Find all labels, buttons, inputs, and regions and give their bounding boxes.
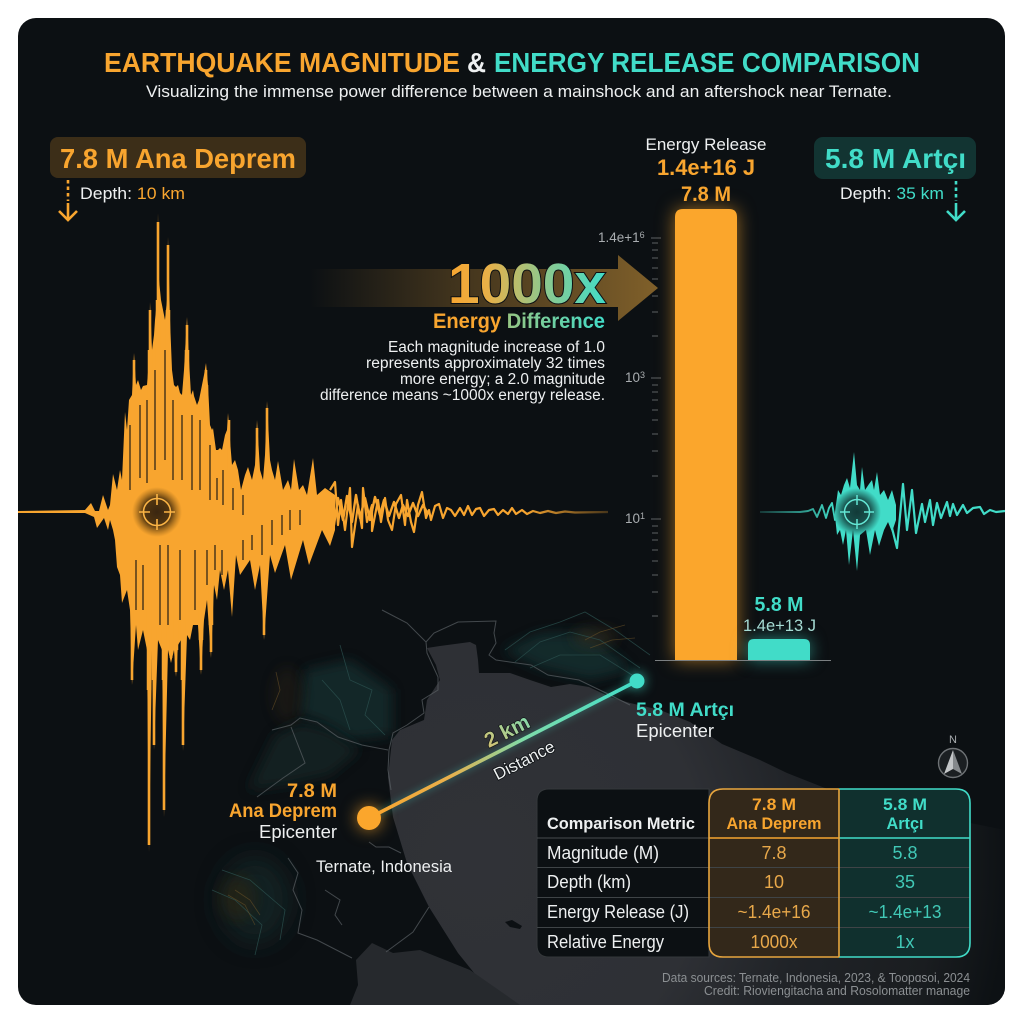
bar: 5.8 M (748, 639, 810, 660)
axis labels: 3 (640, 370, 645, 380)
label: 7.8 M bar (646, 135, 766, 206)
bar chart: energy release (598, 135, 831, 660)
credits: Data sources: Ternate, Indonesia, 2023, & Toopɑsoi, 2024 (662, 971, 970, 985)
title: EARTHQUAKE MAGNITUDE (104, 47, 460, 78)
header row: Ana Deprem (726, 814, 822, 833)
title: ENERGY RELEASE COMPARISON (494, 47, 920, 78)
title (104, 47, 920, 78)
heading: energy difference: Energy Difference (433, 310, 605, 333)
marker: aftershock epicenter (630, 674, 644, 688)
distance value: 2 km (481, 710, 534, 753)
panel: aftershock label (814, 137, 976, 220)
sea (388, 642, 1005, 1005)
explanatory text (320, 339, 605, 404)
aftershock values (868, 843, 942, 952)
marker: mainshock epicenter (357, 806, 381, 830)
chip: 7.8 M Ana Deprem: 7.8 M Ana Deprem (60, 143, 296, 174)
distance line (369, 681, 637, 818)
second tail trace (330, 495, 428, 525)
arrow: energy difference (310, 255, 658, 321)
aftershock values: 35 (895, 872, 915, 892)
axis labels: 6 (640, 230, 645, 240)
wide spike bases (149, 300, 211, 690)
explanatory text: represents approximately 32 times (366, 355, 605, 372)
aftershock column (839, 789, 970, 957)
row labels: Relative Energy (547, 932, 664, 952)
icon: north compass (938, 734, 968, 778)
land tint patches (219, 627, 632, 944)
chip: 5.8 M Artçı (814, 137, 976, 179)
axis labels (598, 230, 645, 526)
roads and coast lines (257, 610, 630, 958)
explanatory text: Each magnitude increase of 1.0 (388, 339, 605, 356)
row labels (547, 843, 689, 952)
label: mainshock epicenter: 7.8 M (287, 781, 337, 802)
label: aftershock epicenter: Epicenter (636, 721, 714, 741)
header row: 5.8 M (883, 795, 927, 814)
icon: depth arrow (947, 181, 965, 220)
label: 5.8 M bar (743, 594, 816, 635)
header row: Artçı (886, 814, 924, 833)
depth text: Depth: 35 km (840, 184, 944, 203)
row labels: Energy Release (J) (547, 902, 689, 922)
distance caption: Distance (490, 737, 558, 784)
depth text: Depth: 10 km (80, 184, 185, 203)
row dividers (537, 868, 970, 928)
mainshock values: ~1.4e+16 (738, 902, 810, 922)
metric column background (537, 789, 709, 957)
label: 5.8 M bar: 5.8 M (754, 594, 804, 616)
icon: mainshock crosshair (132, 487, 182, 537)
header row (547, 795, 927, 833)
chart: aftershock seismic waveform (760, 452, 1005, 571)
title: & (467, 47, 486, 78)
label: mainshock epicenter: Epicenter (259, 822, 337, 842)
tail zigzags (890, 484, 1005, 548)
axis labels: 1 (640, 511, 645, 521)
panel: mainshock label (50, 137, 306, 220)
credits: Credit: Rioviengitacha and Rosolomatter manage (704, 984, 970, 998)
icon: north compass: N (949, 734, 957, 746)
comparison table (537, 789, 970, 957)
dark slits between spikes (130, 350, 300, 625)
aftershock values: ~1.4e+13 (868, 902, 942, 922)
axis labels: 10 (625, 370, 640, 385)
mainshock column (709, 789, 839, 957)
mainshock values (738, 843, 810, 952)
row labels: Magnitude (M) (547, 843, 659, 863)
map: Ternate region (212, 610, 1005, 1005)
baseline (655, 660, 831, 662)
icon: depth arrow (59, 180, 77, 220)
chip: 5.8 M Artçı: 5.8 M Artçı (825, 143, 966, 174)
tail zigzag (330, 482, 608, 547)
credits (662, 971, 970, 998)
mainshock values: 1000x (750, 932, 798, 952)
label: 7.8 M bar: Energy Release (646, 135, 766, 154)
chart: mainshock seismic waveform (18, 213, 608, 852)
header row: 7.8 M (752, 795, 796, 814)
mainshock values: 7.8 (761, 843, 787, 863)
axis labels: 10 (625, 511, 640, 526)
bar: 7.8 M (675, 209, 737, 660)
label: 7.8 M bar: 7.8 M (681, 183, 731, 206)
label: 7.8 M bar: 1.4e+16 J (657, 155, 755, 180)
label: Ternate: Ternate, Indonesia (316, 858, 453, 876)
explanatory text: difference means ~1000x energy release. (320, 387, 605, 404)
label: 5.8 M bar: 1.4e+13 J (743, 616, 816, 635)
header row: Comparison Metric (547, 814, 695, 833)
contour lines (212, 612, 650, 955)
label: mainshock epicenter: Ana Deprem (229, 801, 337, 822)
label: aftershock epicenter: 5.8 M Artçı (636, 700, 734, 721)
southern sea inlet (350, 943, 520, 1005)
spike shafts (132, 222, 267, 845)
label: aftershock epicenter (636, 700, 734, 741)
small island (505, 920, 522, 929)
aftershock values: 1x (895, 932, 915, 952)
label: mainshock epicenter (229, 781, 337, 842)
row labels: Depth (km) (547, 872, 631, 892)
aftershock values: 5.8 (892, 843, 918, 863)
callout: 1000x energy difference (320, 252, 606, 404)
subtitle: Visualizing the immense power difference between a mainshock and an aftershock near Ternate. (146, 82, 892, 101)
big number 1000x: 1000x (448, 252, 606, 316)
column outlines (709, 789, 839, 957)
axis labels: 1.4e+1 (598, 230, 640, 245)
icon: aftershock crosshair (833, 488, 881, 536)
epicenter connection (357, 674, 644, 830)
mainshock values: 10 (764, 872, 784, 892)
explanatory text: more energy; a 2.0 magnitude (400, 371, 605, 388)
axis ticks (651, 238, 661, 616)
